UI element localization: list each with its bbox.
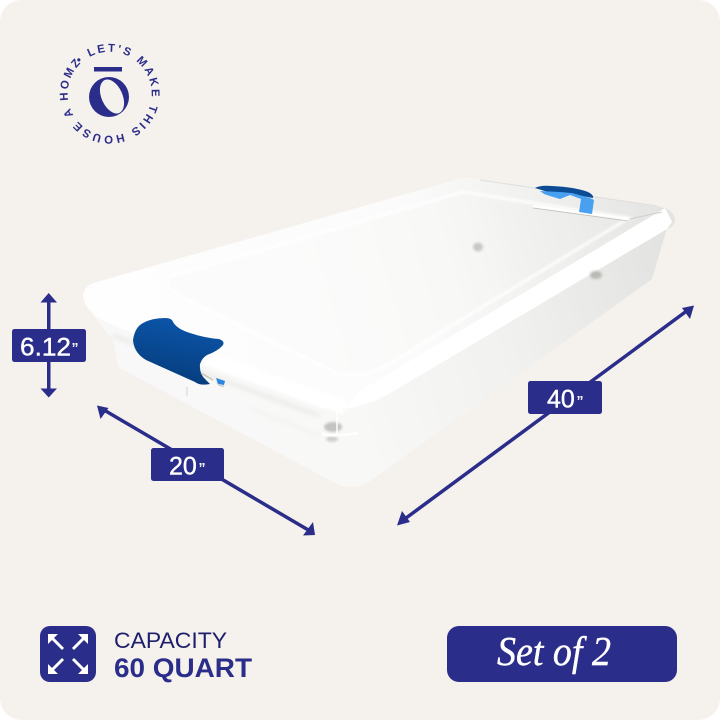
front blue latch <box>133 318 225 396</box>
logo bar <box>94 67 122 72</box>
badge: set of 2: Set of 2 <box>497 628 611 674</box>
length label: ” <box>576 392 584 408</box>
length label <box>528 381 602 414</box>
icon: capacity expanding arrows <box>40 626 96 682</box>
width arrow <box>97 406 315 536</box>
front rim <box>205 358 345 408</box>
box base <box>92 228 667 487</box>
lid shadow on base <box>113 335 320 416</box>
clip peg: front corner <box>322 412 358 442</box>
width label: ” <box>198 460 206 476</box>
clip peg: rear <box>590 271 602 279</box>
dimension: width 20 inches <box>97 406 315 536</box>
width label <box>151 448 224 481</box>
length arrow <box>397 306 694 526</box>
logo letter o <box>89 76 129 117</box>
lid <box>83 178 675 409</box>
height label <box>12 329 86 362</box>
dimension: length 40 inches <box>397 306 694 526</box>
logo ring text: • LET'S MAKE THIS HOUSE A HOMZ <box>60 44 160 144</box>
height label: ” <box>72 340 78 356</box>
badge: set of 2 <box>447 626 677 682</box>
capacity text: CAPACITY <box>114 628 227 653</box>
rear blue latch <box>535 186 594 214</box>
product: clear storage box <box>83 178 675 487</box>
logo: circular brand mark <box>60 44 160 144</box>
height arrow <box>40 293 57 398</box>
flange shading <box>250 408 320 436</box>
dimension: height 6.12 inches <box>12 293 86 398</box>
long white rim <box>345 208 672 409</box>
rear rim lines <box>480 180 662 221</box>
lid inner panel <box>167 192 629 375</box>
length label: 40 <box>547 386 575 414</box>
capacity text <box>114 628 253 683</box>
clip peg: lid centre <box>473 242 483 252</box>
width label: 20 <box>169 452 197 480</box>
height label: 6.12 <box>20 334 71 362</box>
capacity text: 60 QUART <box>114 653 253 683</box>
